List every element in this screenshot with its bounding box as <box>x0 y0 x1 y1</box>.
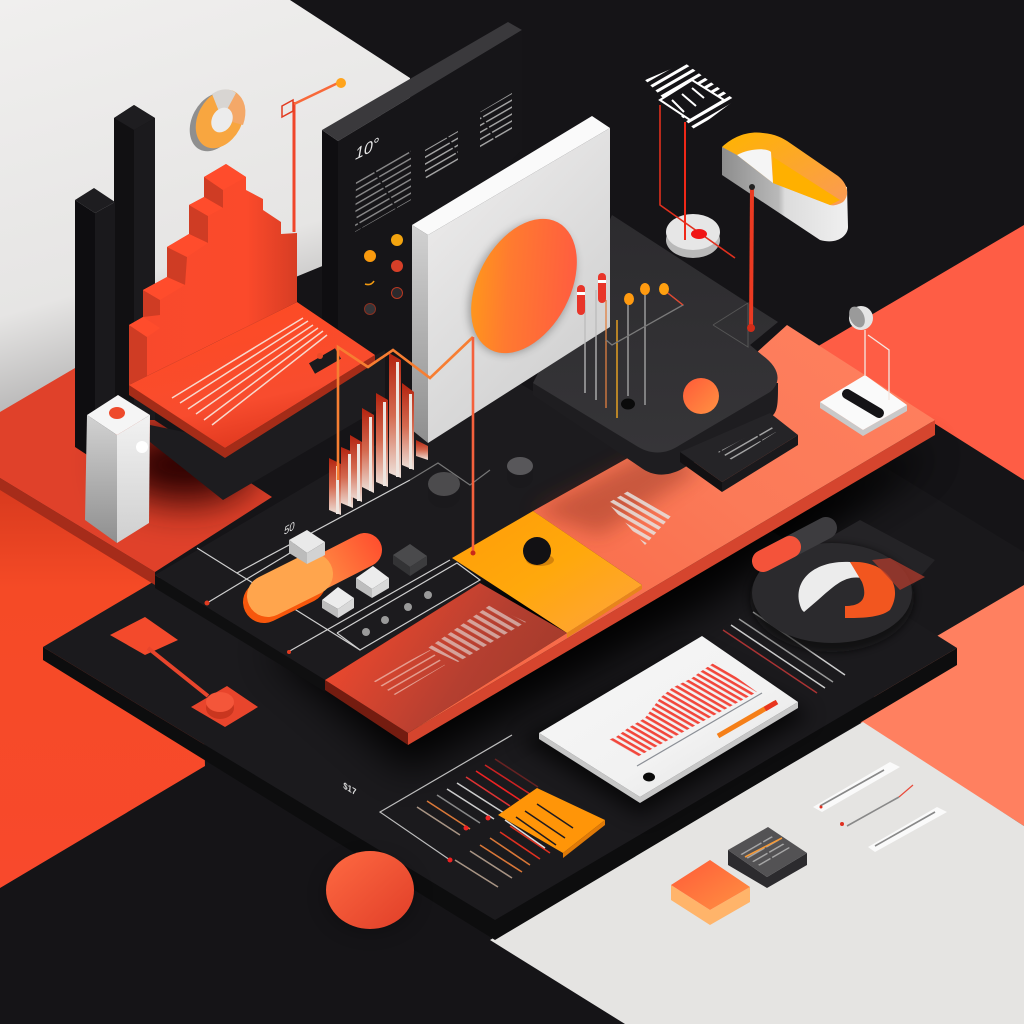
orange cube <box>671 860 750 925</box>
white panel with orange circle <box>412 116 610 443</box>
white disc node <box>660 105 735 258</box>
arc chart <box>799 562 862 612</box>
orange tile with ball <box>452 511 642 638</box>
background: right black layer <box>560 458 1024 640</box>
ruled lines on base <box>172 318 327 425</box>
orange capsule tray <box>722 133 848 241</box>
small icons row <box>362 591 432 636</box>
cube 3 <box>322 587 354 618</box>
dark cube <box>393 544 427 576</box>
dark device on platform <box>533 215 798 492</box>
shadow under middle platform <box>300 450 935 760</box>
coral ball <box>683 378 719 414</box>
background: left red panel <box>0 488 205 888</box>
tab with text <box>680 413 798 492</box>
black base under laptop <box>150 350 385 500</box>
cube 2 <box>356 566 389 598</box>
donut icon <box>180 81 254 160</box>
background: white top-left panel <box>0 0 410 415</box>
black ball <box>523 537 554 566</box>
dark text panel <box>322 22 522 340</box>
panel: left red platform <box>0 368 272 585</box>
orange connector line <box>338 337 476 556</box>
red flag icon <box>110 617 258 727</box>
big red ball <box>326 851 414 931</box>
black pillars <box>75 105 155 470</box>
disc plate with arc chart <box>750 520 935 652</box>
background: coral right panel <box>815 225 1024 480</box>
white note strips <box>813 762 947 852</box>
red stair chart on laptop base <box>129 164 385 500</box>
cube 1 <box>289 530 325 564</box>
toggle pill <box>765 528 826 560</box>
white card bar chart <box>520 636 810 815</box>
label near cube: 50 <box>284 519 295 538</box>
panel: red chart segment <box>325 583 567 745</box>
red pole <box>747 184 755 332</box>
chart label: $17 <box>343 780 357 798</box>
panel: coral segment <box>408 325 935 745</box>
red pole with flag <box>282 78 346 232</box>
panel heading: 10° <box>355 134 379 164</box>
white box with button <box>85 395 150 543</box>
striped lines by the disc <box>723 612 845 693</box>
panel: black middle platform segment <box>155 372 660 692</box>
white switch plate with lamp <box>820 304 907 436</box>
pin chart <box>577 273 683 418</box>
orange chart tile <box>498 788 605 858</box>
dark box with text lines <box>728 827 807 888</box>
pill shape <box>264 550 365 602</box>
background: lower coral panel <box>860 580 1024 826</box>
bottom line chart <box>343 735 605 887</box>
cylinders <box>428 457 533 508</box>
ribbon bar chart <box>329 353 428 515</box>
stair silhouette <box>129 164 297 385</box>
striped document icon <box>645 63 735 130</box>
background: white lower-right panel <box>490 722 1024 1024</box>
cubes <box>289 530 427 618</box>
